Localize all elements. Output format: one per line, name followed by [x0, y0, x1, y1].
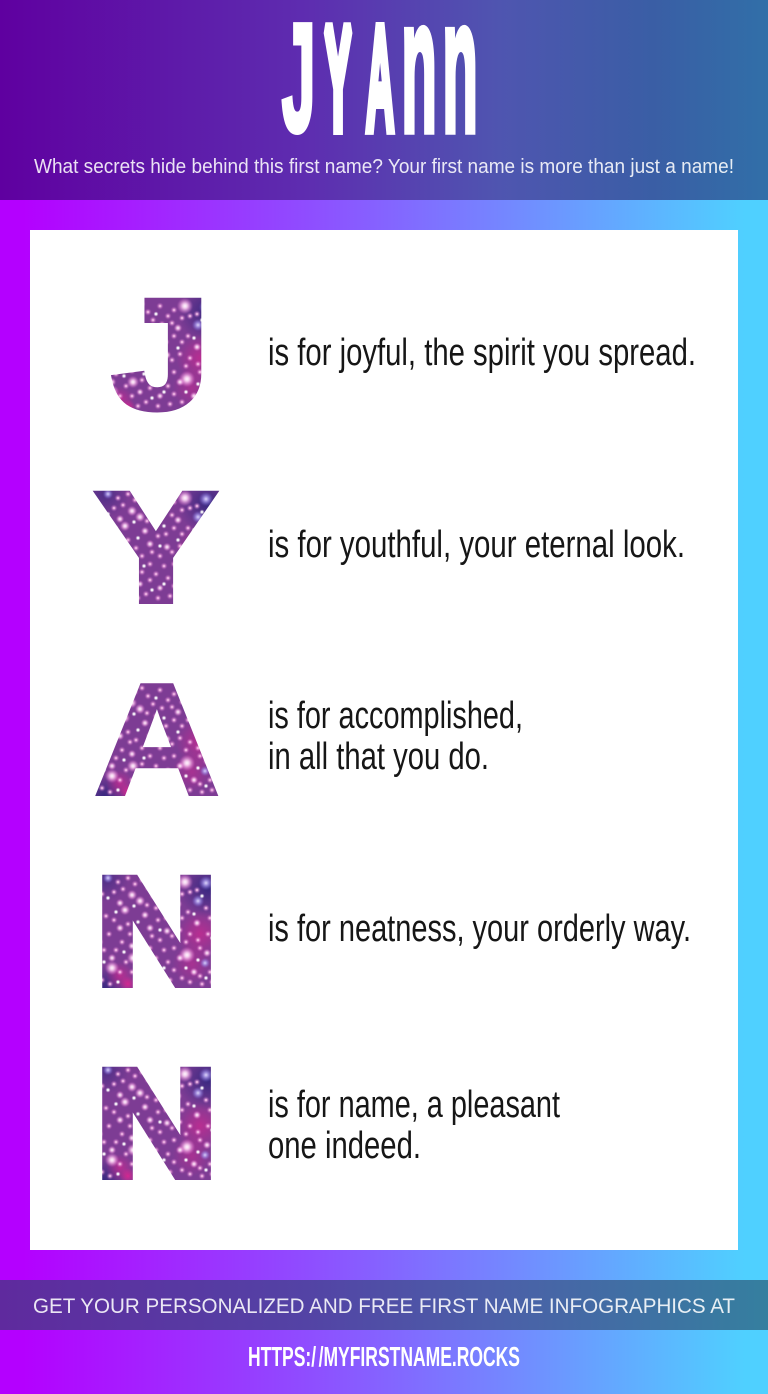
text N: is for name, a pleasant	[268, 1084, 560, 1126]
title: Y	[325, 0, 351, 159]
text N: one indeed.	[268, 1125, 421, 1167]
footer text: GET YOUR PERSONALIZED AND FREE FIRST NAME INFOGRAPHICS AT	[33, 1295, 735, 1318]
text A: in all that you do.	[268, 736, 489, 778]
website url: HTTPS://MYFIRSTNAME.ROCKS	[248, 1341, 520, 1372]
letter Y: Y	[98, 462, 214, 633]
row N	[95, 846, 691, 1017]
row Y	[98, 462, 685, 633]
row J	[114, 269, 696, 440]
row N second	[95, 1038, 560, 1209]
white content panel	[30, 230, 738, 1250]
text A: is for accomplished,	[268, 695, 523, 737]
subtitle: What secrets hide behind this first name? Your first name is more than just a name!	[34, 156, 734, 178]
text N	[268, 1084, 560, 1167]
letter N: N	[95, 1038, 218, 1209]
title: A	[366, 0, 394, 160]
text A	[268, 695, 523, 778]
row A	[94, 652, 523, 828]
title	[282, 0, 478, 172]
footer band	[0, 1280, 768, 1330]
letter N: N	[95, 846, 218, 1017]
letter J: J	[114, 269, 208, 440]
letter A: A	[94, 652, 220, 828]
header band	[0, 0, 768, 200]
